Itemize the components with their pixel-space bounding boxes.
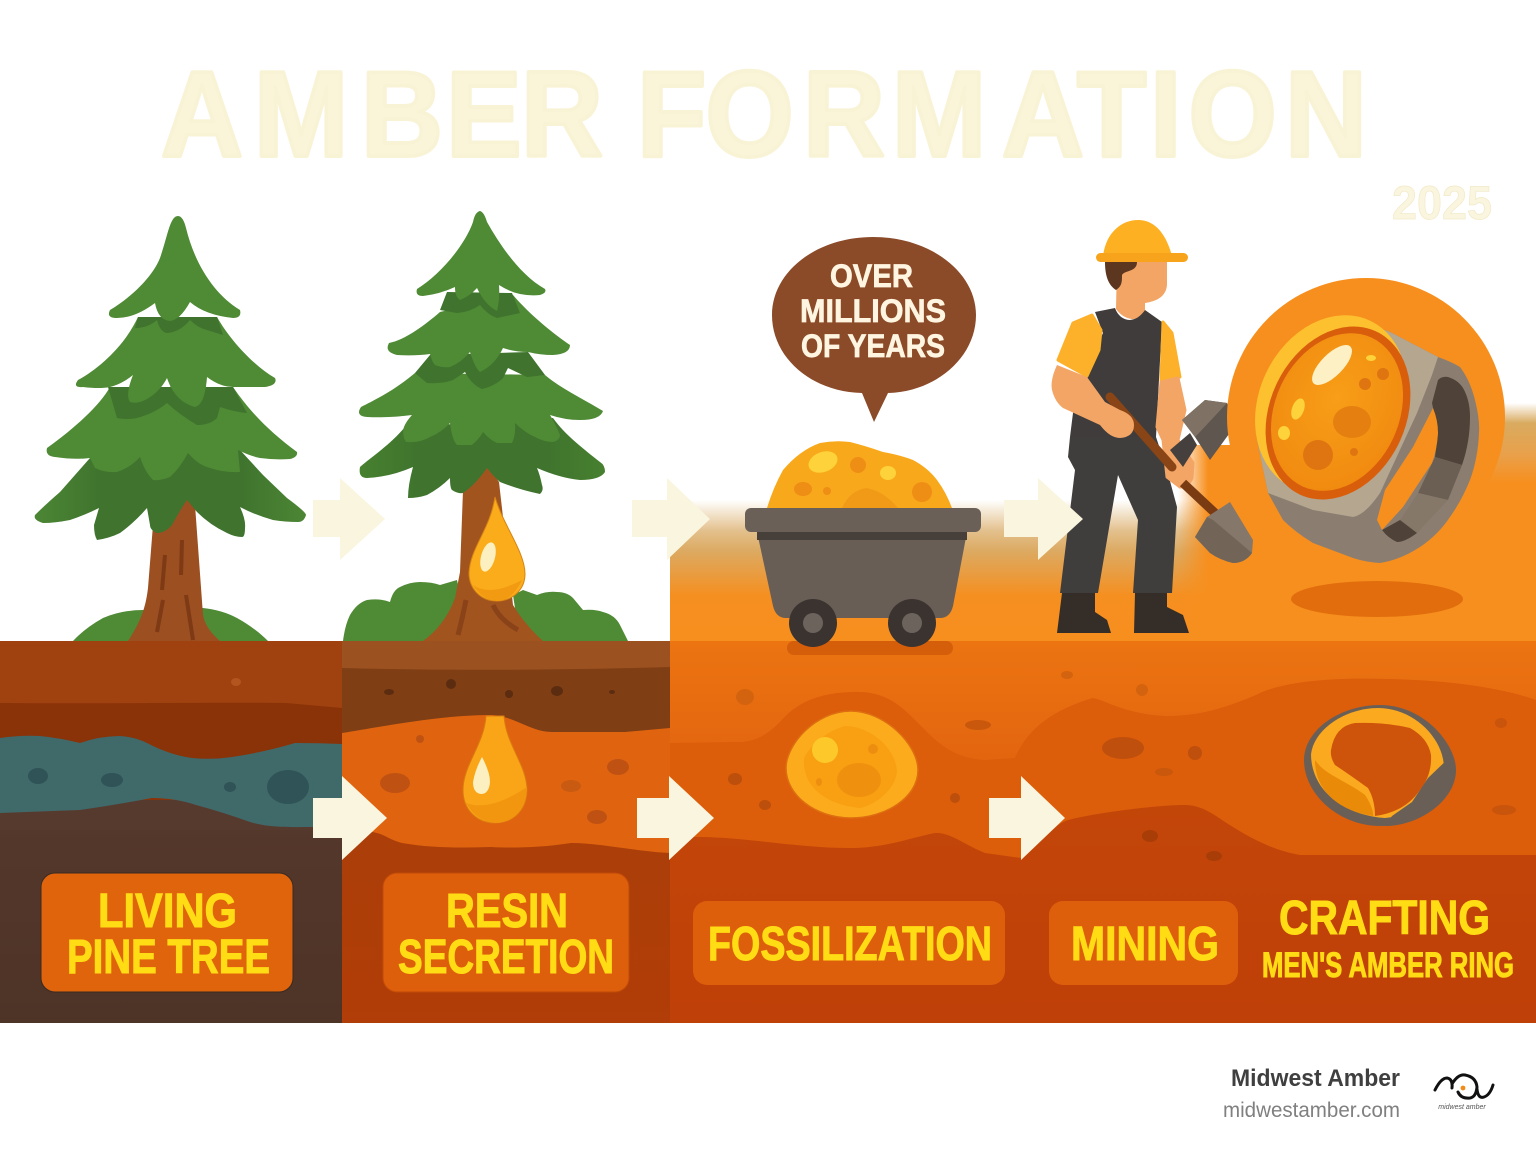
- arrow: tree to resin, above ground: [313, 478, 385, 560]
- cart wheels: [789, 599, 837, 647]
- bush: [73, 608, 268, 641]
- callout: over millions of years: OF YEARS: [801, 328, 945, 364]
- label: fossilization: [693, 901, 1005, 985]
- top shade band: [440, 292, 520, 318]
- shovel head: [1182, 400, 1237, 460]
- inner band: [1432, 377, 1470, 465]
- icon: midwest amber logo: midwest amber: [1438, 1104, 1486, 1111]
- hard hat: [1103, 220, 1172, 256]
- amber pile: [767, 441, 952, 508]
- top tier: [109, 216, 240, 321]
- icon: midwest amber logo: [1435, 1075, 1493, 1111]
- panel: underground soil layers: [0, 641, 1536, 1023]
- ring opening: [1377, 408, 1438, 530]
- label: living pine tree: LIVING: [98, 885, 237, 938]
- label: mining: [1049, 901, 1238, 985]
- third tier: [47, 387, 297, 480]
- icon: fossil amber: [786, 711, 918, 818]
- icon: mine cart with amber: [745, 441, 981, 655]
- panel: amber ring: [1227, 278, 1505, 617]
- top shade band: [135, 317, 223, 335]
- right bush: [513, 590, 628, 641]
- second tier: [388, 295, 570, 372]
- cart body: [757, 532, 967, 618]
- icon: first pine tree: [35, 216, 306, 641]
- arrow: resin to fossil, underground: [637, 776, 714, 860]
- top tier: [417, 211, 545, 311]
- boots: [1057, 593, 1111, 633]
- shadow: [787, 641, 953, 655]
- label: crafting men's amber ring: CRAFTING: [1279, 892, 1490, 945]
- footer website: midwestamber.com: [1223, 1099, 1400, 1122]
- label: resin secretion: RESIN: [446, 885, 568, 938]
- label: resin secretion: [383, 873, 629, 992]
- glow circle: [1227, 278, 1505, 556]
- vest: [1070, 308, 1162, 437]
- soil column: resin secretion: [342, 641, 670, 1023]
- icon: second pine tree with bushes: [343, 211, 628, 641]
- lowest tier: [35, 380, 306, 540]
- head: [1116, 262, 1167, 319]
- trousers: [1060, 437, 1177, 593]
- callout: over millions of years: MILLIONS: [800, 293, 946, 329]
- trunk: [128, 495, 220, 641]
- arrow: fossil to mining, underground: [989, 776, 1065, 860]
- footer brand name: Midwest Amber: [1231, 1065, 1400, 1092]
- icon: miner with shovel: [1052, 220, 1253, 633]
- trunk: [423, 465, 543, 641]
- soil column: living pine tree: [0, 641, 342, 1023]
- callout: over millions of years: OVER: [830, 258, 913, 294]
- shade band: [415, 352, 545, 389]
- arrow: resin to fossil, above ground: [632, 478, 710, 560]
- shovel handle: [1110, 397, 1172, 467]
- arrow: tree to resin, underground: [313, 776, 387, 860]
- ring shoulder: [1257, 317, 1438, 517]
- sleeves: [1058, 315, 1101, 376]
- callout: over millions of years: [772, 237, 976, 422]
- shadow: [1291, 581, 1463, 617]
- icon: rough amber in rock: [1304, 705, 1456, 826]
- year: 2025: [1392, 176, 1492, 229]
- label: living pine tree: PINE TREE: [67, 931, 270, 984]
- icon: resin drop on trunk: [469, 497, 525, 601]
- third tier: [359, 373, 603, 445]
- amber stone: [1227, 290, 1435, 518]
- left bush: [343, 580, 470, 641]
- label: fossilization: FOSSILIZATION: [708, 918, 992, 971]
- soil columns: fossilization, mining and crafting: [670, 641, 1536, 1023]
- shade band: [108, 387, 247, 425]
- icon: underground resin drop: [463, 716, 527, 823]
- label: resin secretion: SECRETION: [398, 931, 614, 984]
- ring band: [1257, 317, 1479, 563]
- lowest tier: [360, 418, 605, 498]
- arrow: cart to miner, above ground: [1004, 478, 1083, 560]
- label: mining: MINING: [1071, 918, 1219, 971]
- left arm: [1052, 365, 1134, 438]
- title: AMBER FORMATION: [161, 45, 1367, 182]
- second tier: [76, 317, 276, 407]
- label: crafting men's amber ring: [1262, 892, 1514, 985]
- right arm: [1157, 378, 1193, 487]
- label: living pine tree: [41, 873, 293, 992]
- shovel blade: [1195, 502, 1253, 563]
